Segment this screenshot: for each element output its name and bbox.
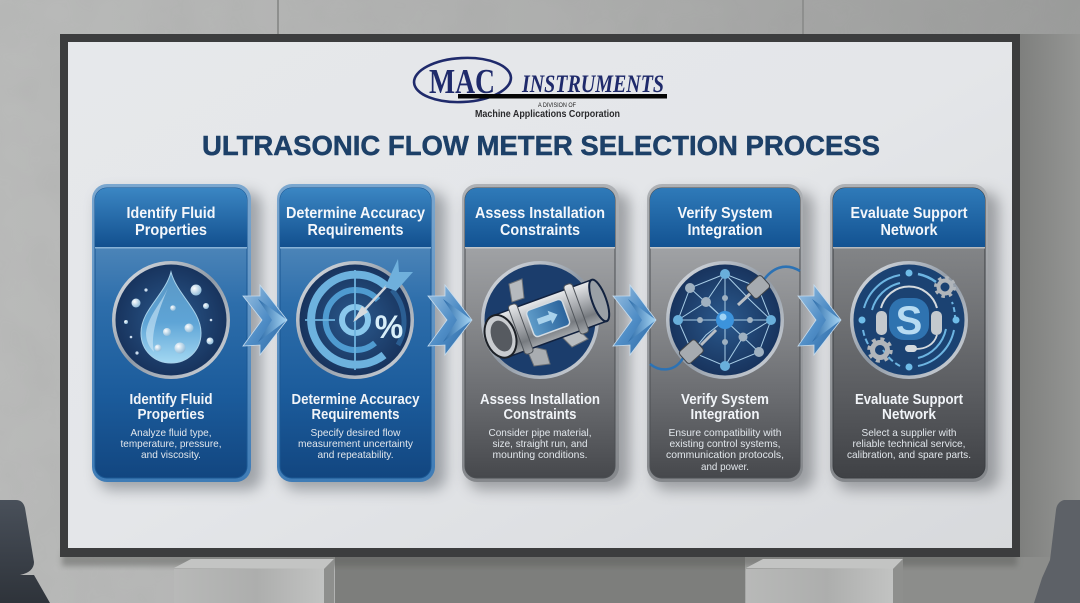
logo MAC lettering: MAC <box>429 62 495 101</box>
support block right <box>746 559 903 603</box>
description: calibration, and spare parts. <box>847 449 971 461</box>
gear lower left <box>869 339 891 361</box>
logo company text: Machine Applications Corporation <box>475 108 620 120</box>
lower heading: Identify Fluid <box>130 392 212 408</box>
description: Analyze fluid type, <box>130 427 212 439</box>
lower heading: Determine Accuracy <box>292 392 420 408</box>
logo ellipse <box>413 55 512 105</box>
header text: Evaluate Support <box>850 205 968 222</box>
header text <box>850 205 968 239</box>
lower cable and plug <box>650 330 716 369</box>
description <box>488 427 592 461</box>
lower heading: Verify System <box>681 392 769 408</box>
description <box>298 427 414 461</box>
description: Ensure compatibility with <box>668 427 782 439</box>
icon: target with arrow and percent <box>296 259 414 379</box>
description: and repeatability. <box>318 449 394 461</box>
display frame <box>60 34 1020 557</box>
header text: Network <box>880 222 938 239</box>
header text: Determine Accuracy <box>286 205 425 222</box>
lower heading <box>681 392 769 423</box>
header text <box>678 205 772 239</box>
lower heading: Integration <box>690 407 760 423</box>
arrow: step 2 to 3 <box>428 285 472 355</box>
description: temperature, pressure, <box>120 438 222 450</box>
header band <box>465 188 615 247</box>
lower heading: Evaluate Support <box>855 392 963 408</box>
arrow: step 3 to 4 <box>613 285 656 355</box>
panel: step 2 Determine Accuracy Requirements <box>277 184 446 490</box>
header band <box>650 188 800 247</box>
description: communication protocols, <box>666 449 784 461</box>
support block left <box>174 559 334 603</box>
letter S: S <box>896 299 922 343</box>
header text <box>475 205 605 239</box>
description: measurement uncertainty <box>298 438 414 450</box>
panel: step 3 Assess Installation Constraints <box>462 184 630 490</box>
header text: Identify Fluid <box>126 205 216 222</box>
description: Select a supplier with <box>862 427 957 439</box>
description: existing control systems, <box>670 438 780 450</box>
panel: step 4 Verify System Integration <box>647 184 814 490</box>
chair right <box>1034 500 1080 603</box>
title: ULTRASONIC FLOW METER SELECTION PROCESS <box>202 130 880 161</box>
icon: network with plugs <box>650 261 800 379</box>
header text: Properties <box>135 222 207 239</box>
logo division text: A DIVISION OF <box>538 103 576 109</box>
description: mounting conditions. <box>492 449 588 461</box>
lower heading: Properties <box>138 407 204 423</box>
header text: Verify System <box>678 205 772 222</box>
description: and power. <box>701 461 749 473</box>
gear upper right <box>936 278 954 296</box>
logo: MAC Instruments <box>413 55 667 120</box>
lower heading: Network <box>882 407 937 423</box>
description <box>847 427 971 461</box>
header band <box>280 188 431 247</box>
header text <box>286 205 425 239</box>
icon: support headset <box>850 261 968 379</box>
lower heading <box>292 392 420 423</box>
description: Consider pipe material, <box>488 427 592 439</box>
lower heading: Constraints <box>504 407 576 423</box>
description: size, straight run, and <box>492 438 588 450</box>
header text <box>126 205 216 239</box>
description: reliable technical service, <box>852 438 966 450</box>
header text: Integration <box>688 222 762 239</box>
upper cable and plug <box>738 267 800 305</box>
panel: step 1 Identify Fluid Properties <box>92 184 262 490</box>
header text: Requirements <box>308 222 404 239</box>
header band <box>95 188 247 247</box>
icon: pipe section <box>478 261 615 379</box>
lower heading <box>130 392 212 423</box>
lower heading <box>480 392 600 423</box>
header band <box>833 188 985 247</box>
header text: Constraints <box>500 222 580 239</box>
lower heading: Assess Installation <box>480 392 600 408</box>
arrow: step 1 to 2 <box>243 285 287 355</box>
icon: water drop <box>112 261 230 379</box>
lower heading <box>855 392 963 423</box>
header text: Assess Installation <box>475 205 605 222</box>
panel: step 5 Evaluate Support Network <box>830 184 999 490</box>
description <box>120 427 222 461</box>
description <box>666 427 784 473</box>
description: and viscosity. <box>141 449 201 461</box>
logo INSTRUMENTS lettering: INSTRUMENTS <box>521 71 664 98</box>
logo bar <box>458 94 667 98</box>
description: Specify desired flow <box>310 427 401 439</box>
percent sign: % <box>375 309 403 345</box>
arrow: step 4 to 5 <box>798 285 841 355</box>
chair left <box>0 500 50 603</box>
lower heading: Requirements <box>312 407 400 423</box>
